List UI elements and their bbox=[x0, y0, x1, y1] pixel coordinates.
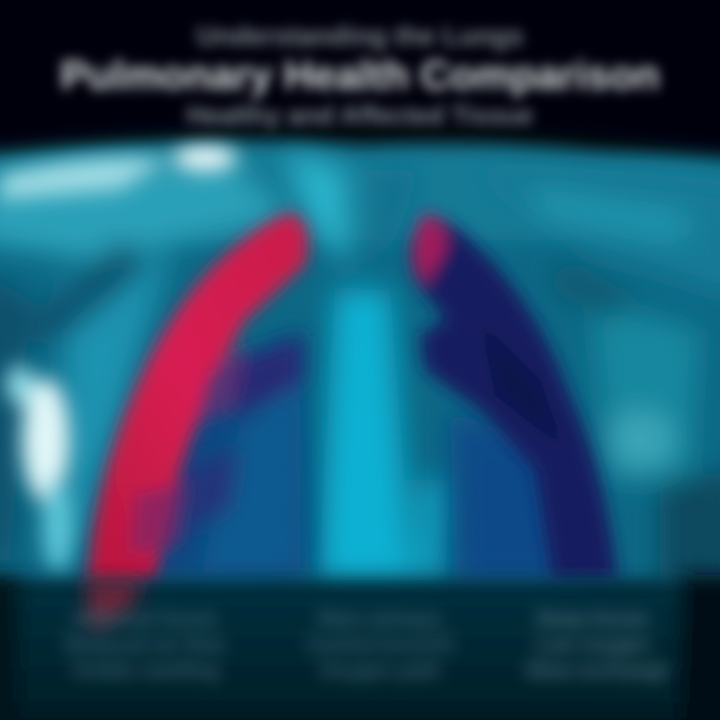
text block: right caption: Low oxygen bbox=[535, 634, 650, 656]
left lung bbox=[88, 212, 310, 585]
title: Pulmonary Health Comparison bbox=[60, 52, 660, 98]
text block: centre caption: Oxygen path bbox=[319, 660, 441, 682]
text block: left caption: Reduced air flow bbox=[65, 634, 225, 656]
title bbox=[53, 20, 667, 134]
right lung bbox=[410, 212, 618, 585]
bottom dark band bbox=[0, 575, 720, 720]
top dark header bbox=[0, 0, 720, 155]
left shoulder and ribs bbox=[0, 160, 290, 560]
text block: right caption bbox=[522, 606, 672, 686]
red reflection under left lung bbox=[85, 580, 145, 632]
title: Understanding the Lungs bbox=[196, 21, 524, 51]
text block: right caption: Slow exchange bbox=[525, 660, 670, 682]
spine centre column bbox=[285, 150, 450, 580]
text block: centre caption bbox=[306, 607, 454, 686]
text block: left caption: Visible swelling bbox=[71, 660, 219, 682]
bright highlights bbox=[0, 145, 237, 573]
right shoulder and ribs bbox=[470, 170, 720, 590]
text block: right caption: Deep tissue bbox=[536, 608, 649, 630]
title: Healthy and Affected Tissue bbox=[187, 100, 533, 130]
text block: left caption: Inflamed tissue bbox=[72, 608, 218, 630]
text block: centre caption: Central bronchi bbox=[306, 634, 454, 656]
text block: centre caption: Main airways bbox=[318, 608, 442, 630]
text block: left caption bbox=[62, 606, 226, 684]
torso background bbox=[0, 139, 720, 590]
